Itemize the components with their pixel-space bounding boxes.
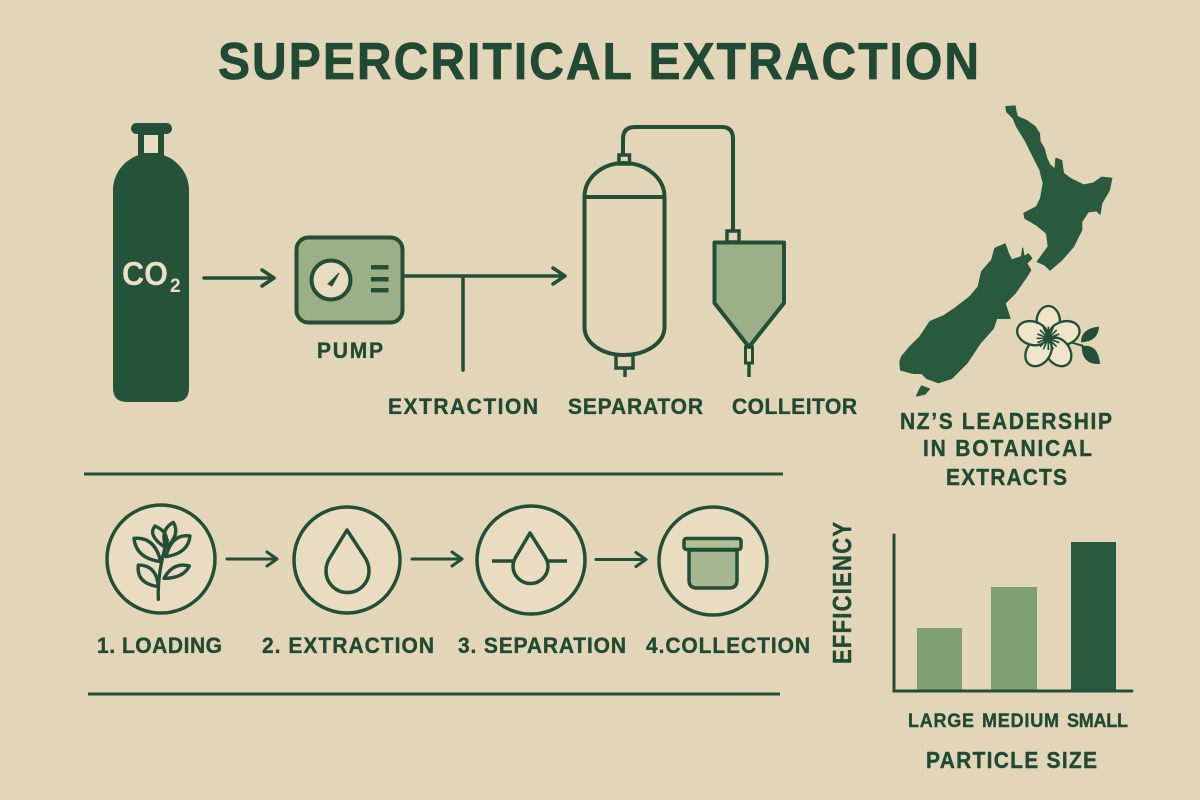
icon: CO2 cylinder (113, 123, 189, 402)
icon: pump (296, 238, 402, 322)
icon: collector vessel (714, 231, 784, 377)
bar chart: efficiency vs particle size (828, 522, 1132, 773)
label: step 4: 4.COLLECTION (646, 634, 810, 658)
bar chart: efficiency vs particle size: LARGE (908, 710, 974, 732)
label: pump: PUMP (317, 337, 383, 363)
icon: separator vessel (584, 155, 664, 377)
arrow: step 3 to 4 (596, 552, 646, 566)
bar chart: efficiency vs particle size: MEDIUM (982, 710, 1059, 732)
divider bottom (88, 692, 780, 696)
icon: CO2 cylinder: 2 (170, 276, 181, 297)
icon: step 2 extraction drop (294, 507, 400, 613)
heading: NZ leadership (900, 408, 1112, 490)
bar chart: efficiency vs particle size: EFFICIENCY (828, 522, 857, 664)
icon: manuka flower (1014, 306, 1100, 371)
arrow: pump to separator with branch (403, 268, 565, 370)
label: step 3: 3. SEPARATION (458, 634, 626, 658)
icon: step 1 loading plant (107, 505, 215, 613)
label: extraction: EXTRACTION (388, 393, 538, 419)
icon: CO2 cylinder: CO (122, 255, 168, 292)
heading: NZ leadership: IN BOTANICAL (923, 435, 1092, 461)
divider top (84, 472, 783, 476)
label: separator: SEPARATOR (568, 393, 703, 419)
icon: step 4 collection jar (659, 507, 767, 615)
label: step 2: 2. EXTRACTION (262, 634, 434, 658)
bar chart: efficiency vs particle size: PARTICLE SIZE (926, 747, 1097, 773)
bar chart: efficiency vs particle size: SMALL (1067, 710, 1128, 732)
pipe: separator to collector (623, 127, 733, 231)
title: SUPERCRITICAL EXTRACTION (218, 32, 979, 90)
heading: NZ leadership: NZ’S LEADERSHIP (900, 408, 1112, 434)
arrow: step 1 to 2 (227, 552, 277, 566)
label: step 1: 1. LOADING (97, 634, 222, 658)
label: collector: COLLEITOR (732, 393, 857, 419)
map: New Zealand (900, 106, 1112, 396)
arrow: cylinder to pump (204, 270, 274, 286)
arrow: step 2 to 3 (412, 552, 462, 566)
icon: step 3 separation drop (477, 506, 585, 614)
heading: NZ leadership: EXTRACTS (946, 464, 1067, 490)
